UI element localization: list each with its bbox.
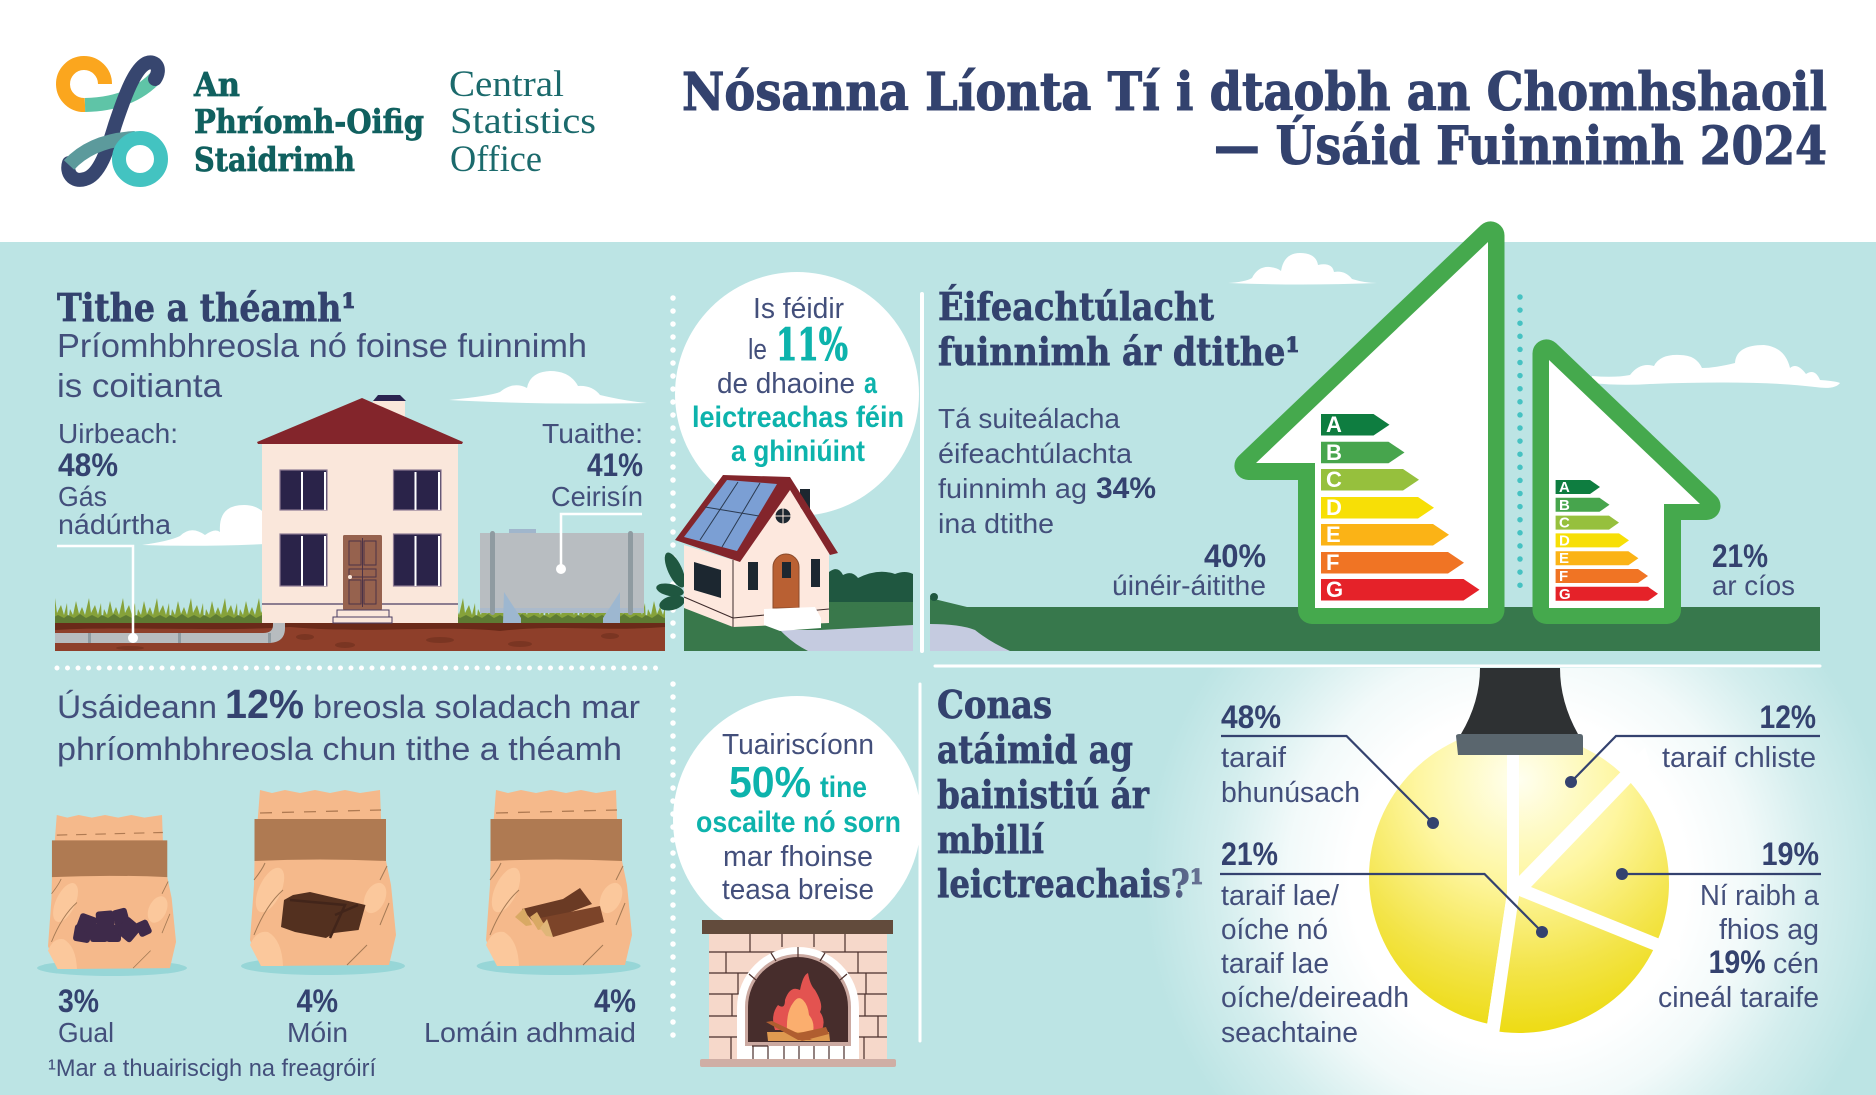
rating letters: A <box>1326 412 1342 437</box>
solar panel <box>684 480 777 551</box>
white circle <box>673 696 921 944</box>
heading: energy efficiency: fuinnimh ár dtithe¹ <box>938 329 1300 374</box>
rating letters: C <box>1559 514 1570 532</box>
heading: heating homes: Tithe a théamh¹ <box>57 285 356 330</box>
stat: urban gas: Uirbeach: <box>58 418 178 449</box>
heading: managing electricity bills <box>937 682 1204 906</box>
oil callout line <box>556 514 642 574</box>
heading: heating homes: Príomhbhreosla nó foinse fuinnimh <box>57 327 587 364</box>
text: solid fuels heading: phríomhbhreosla chun tithe a théamh <box>57 731 622 767</box>
leaves <box>655 550 689 613</box>
rating letters <box>1326 412 1343 602</box>
heading: managing electricity bills: Conas <box>937 682 1052 727</box>
rating letters: G <box>1326 577 1343 602</box>
stat: wood: 4% <box>594 983 636 1019</box>
callout text: a ghiniúint <box>731 435 865 468</box>
callout text: 11% <box>776 320 848 371</box>
stat: rented: ar cíos <box>1712 570 1795 601</box>
label: did not know 19%: 19% <box>1762 836 1819 872</box>
text: solid fuels heading: breosla soladach mar <box>313 689 640 725</box>
stat: rented: 21% <box>1712 538 1768 574</box>
ground with road <box>930 593 1820 651</box>
stat: rented <box>1712 538 1795 601</box>
soil <box>55 623 665 651</box>
heading: managing electricity bills: atáimid ag <box>937 727 1133 772</box>
windows <box>280 470 441 586</box>
shadow <box>37 960 187 976</box>
clouds <box>142 371 647 546</box>
label: day night tariff 21%: oíche/deireadh <box>1221 982 1409 1014</box>
stat: coal <box>58 983 114 1048</box>
bag: coal <box>37 815 187 976</box>
heading: managing electricity bills: bainistiú ár <box>937 772 1150 817</box>
arch <box>737 947 859 1059</box>
round window <box>776 508 790 524</box>
callout lines <box>1220 736 1821 932</box>
logs <box>767 1032 830 1041</box>
chimney <box>373 401 405 430</box>
stat: wood <box>424 983 636 1048</box>
bulb slices <box>1369 740 1669 1033</box>
text: solid fuels heading: Úsáideann <box>57 689 217 725</box>
divider dots and lines <box>57 294 1820 1041</box>
logo wordmark English: Central <box>449 64 564 105</box>
sack <box>486 790 632 966</box>
rating letters: C <box>1326 467 1342 492</box>
bag: wood logs <box>477 790 641 975</box>
soil patches <box>116 633 619 650</box>
logo wordmark Irish: Staidrimh <box>194 140 355 179</box>
logo wordmark English: Office <box>450 139 542 180</box>
rating letters: E <box>1326 522 1341 547</box>
label: smart tariff 12%: taraif chliste <box>1662 742 1816 774</box>
stat: urban gas: Gás <box>58 481 107 512</box>
sack <box>250 790 396 966</box>
steps <box>764 607 821 631</box>
stat: coal: Gual <box>58 1017 114 1048</box>
text: solid fuels heading: 12% <box>225 681 304 727</box>
lamp socket <box>1456 668 1583 755</box>
gas pipe <box>55 623 285 643</box>
stat: peat <box>287 983 348 1048</box>
shadow <box>241 957 405 975</box>
light glow <box>1100 668 1876 1095</box>
stat: rural kerosene: Tuaithe: <box>542 418 643 449</box>
white circle <box>675 272 919 516</box>
text: efficiency installs: éifeachtúlachta <box>938 438 1132 469</box>
label: did not know 19%: 19% <box>1709 944 1766 980</box>
stat: peat: 4% <box>296 983 338 1019</box>
stat: rural kerosene: 41% <box>587 447 643 483</box>
illustration: house with gas pipe and oil tank <box>55 371 665 651</box>
flame <box>773 973 824 1030</box>
logs <box>515 888 604 937</box>
callout text: mar fhoinse <box>723 841 873 873</box>
rating letters: D <box>1559 532 1570 550</box>
logo mark <box>63 62 161 180</box>
text: solid fuels heading <box>57 681 640 767</box>
label: standard tariff 48% <box>1221 699 1360 809</box>
callout text: a <box>864 367 877 400</box>
callout text: leictreachas féin <box>692 401 904 434</box>
title <box>682 62 1827 177</box>
oil tank <box>480 529 644 623</box>
roof <box>257 398 463 444</box>
callout text: 50% <box>729 758 811 807</box>
rating letters <box>1559 479 1571 603</box>
grass <box>55 593 665 623</box>
heading: heating homes <box>57 285 587 404</box>
gas callout line <box>57 546 138 643</box>
rating letters: D <box>1326 495 1342 520</box>
label: day night tariff 21%: taraif lae/ <box>1221 880 1340 912</box>
text: efficiency installs: fuinnimh ag <box>938 473 1087 504</box>
sack <box>48 815 176 969</box>
door <box>343 535 382 610</box>
windows <box>694 559 820 598</box>
body background panel <box>0 242 1876 1095</box>
shadow <box>477 957 641 975</box>
garden and hedge <box>829 569 913 612</box>
stat: urban gas: nádúrtha <box>58 509 171 540</box>
label: day night tariff 21% <box>1221 836 1409 1049</box>
fireplace illustration <box>700 920 896 1067</box>
callout text <box>696 729 901 906</box>
house <box>257 395 463 623</box>
rating letters: F <box>1559 568 1568 585</box>
label: did not know 19%: fhios ag <box>1719 914 1819 946</box>
stat: owner-occupier: úinéir-áitithe <box>1112 570 1266 601</box>
label: did not know 19%: cén <box>1773 948 1819 980</box>
footnote: ¹Mar a thuairiscigh na freagróirí <box>48 1055 376 1082</box>
callout text <box>692 293 904 468</box>
chart: light bulb pie of tariff types <box>1220 668 1821 1045</box>
illustration: house with solar panels <box>655 475 913 651</box>
text: efficiency installs: Tá suiteálacha <box>938 403 1120 434</box>
label: did not know 19%: cineál taraife <box>1658 982 1819 1014</box>
callout text: Is féidir <box>753 293 844 325</box>
door <box>773 554 799 608</box>
callout text: de dhaoine <box>717 368 855 400</box>
text: efficiency installs: 34% <box>1096 472 1156 505</box>
heading: managing electricity bills: leictreachais?¹ <box>937 861 1204 906</box>
road <box>780 625 913 651</box>
icon: rented house with energy rating <box>1546 353 1706 610</box>
rating letters: A <box>1559 479 1570 496</box>
rating letters: B <box>1326 440 1342 465</box>
stat: urban gas: 48% <box>58 447 118 483</box>
rating letters: G <box>1559 586 1571 603</box>
label: smart tariff 12%: 12% <box>1760 699 1816 735</box>
callout text: oscailte nó sorn <box>696 806 901 839</box>
stat: rural kerosene <box>542 418 643 512</box>
logo wordmark English <box>449 64 596 180</box>
logo <box>63 62 596 180</box>
logo wordmark English: Statistics <box>450 101 596 142</box>
heading: energy efficiency <box>938 284 1300 374</box>
label: did not know 19% <box>1658 836 1820 1014</box>
callout text: tine <box>820 771 867 804</box>
roof <box>675 475 838 562</box>
stat: wood: Lomáin adhmaid <box>424 1017 636 1048</box>
label: day night tariff 21%: 21% <box>1221 836 1278 872</box>
icon: owner-occupier house with energy rating <box>1248 235 1490 610</box>
panel: open fire or stove <box>673 696 921 1067</box>
dotted separator <box>1517 297 1523 598</box>
rating letters: E <box>1559 550 1569 567</box>
stat: coal: 3% <box>58 983 99 1019</box>
callout text: teasa breise <box>722 874 874 906</box>
clouds: efficiency <box>1228 253 1840 388</box>
text: efficiency installs <box>938 403 1156 539</box>
label: standard tariff 48%: bhunúsach <box>1221 777 1360 809</box>
callout dots <box>1427 776 1628 938</box>
callout text: Tuairiscíonn <box>722 729 874 761</box>
heading: energy efficiency: Éifeachtúlacht <box>938 284 1214 329</box>
logo wordmark Irish: Phríomh-Oifig <box>194 102 424 141</box>
stat: rural kerosene: Ceirisín <box>551 481 643 512</box>
label: standard tariff 48%: taraif <box>1221 742 1287 774</box>
callout text: le <box>748 334 767 366</box>
heading: heating homes: is coitianta <box>57 367 223 404</box>
steps <box>333 610 392 623</box>
chimney <box>800 489 810 509</box>
coal pieces <box>73 907 153 943</box>
heading: managing electricity bills: mbillí <box>937 817 1044 862</box>
label: standard tariff 48%: 48% <box>1221 699 1281 735</box>
rating bars <box>1556 480 1658 601</box>
stat: urban gas <box>58 418 178 540</box>
logo wordmark Irish <box>193 65 424 179</box>
logo wordmark Irish: An <box>193 65 240 104</box>
base line <box>262 603 458 605</box>
rating letters: B <box>1559 497 1570 514</box>
label: smart tariff 12% <box>1662 699 1816 774</box>
peat block <box>281 892 366 938</box>
stat: owner-occupier: 40% <box>1204 538 1266 574</box>
walls <box>684 487 829 627</box>
stat: owner-occupier <box>1112 538 1266 601</box>
rating bars <box>1321 414 1480 600</box>
label: day night tariff 21%: taraif lae <box>1221 948 1329 980</box>
label: day night tariff 21%: oíche nó <box>1221 914 1328 946</box>
header background <box>0 0 1876 242</box>
text: efficiency installs: ina dtithe <box>938 508 1054 539</box>
panel: own electricity generation <box>655 272 919 651</box>
rating letters: F <box>1326 550 1339 575</box>
label: did not know 19%: Ní raibh a <box>1700 880 1820 912</box>
label: day night tariff 21%: seachtaine <box>1221 1017 1358 1049</box>
bag: peat <box>241 790 405 975</box>
stat: peat: Móin <box>287 1017 348 1048</box>
